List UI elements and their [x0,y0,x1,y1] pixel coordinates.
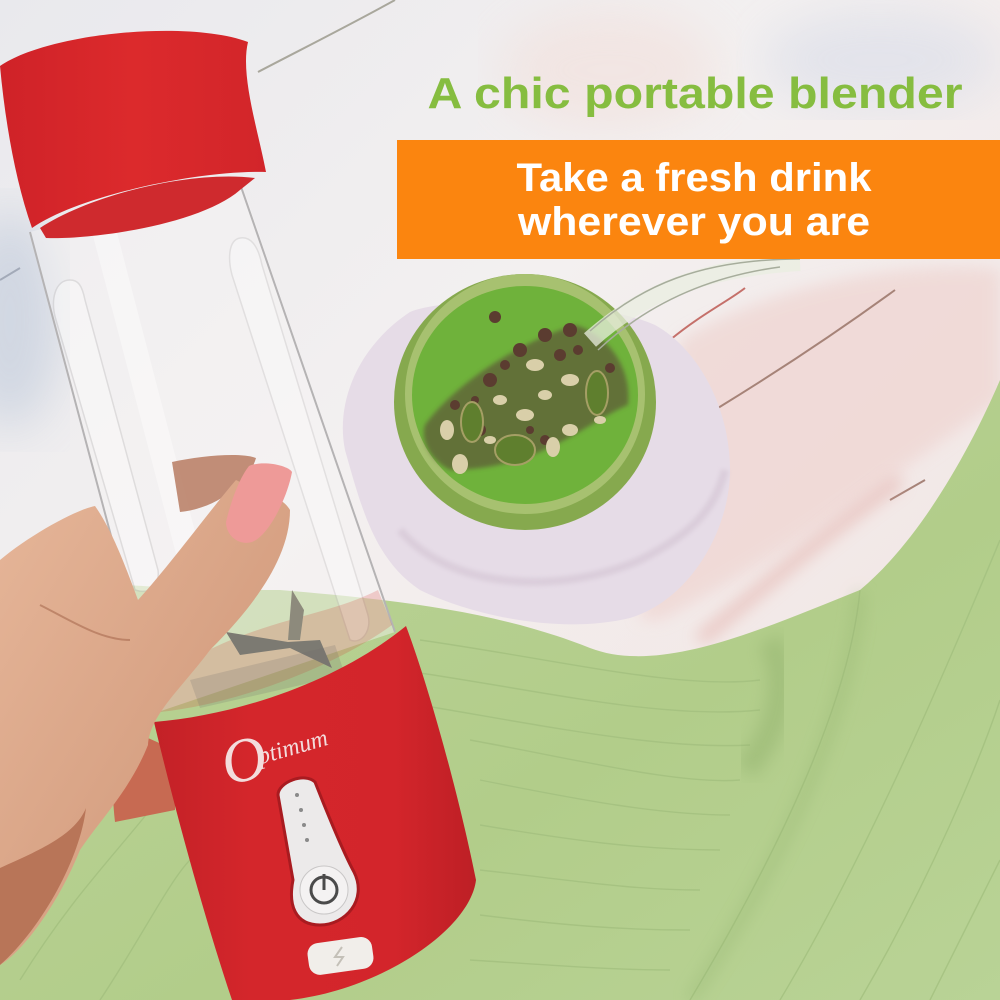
control panel [278,778,358,925]
charging port [306,936,375,976]
icon: power button [300,866,348,914]
brand wordmark: O [213,722,275,799]
seed topping [424,311,628,474]
lilac plate [343,302,730,624]
orange banner [397,140,1000,259]
title: A chic portable blender [428,69,962,118]
smoothie glass [394,259,800,530]
blade [190,590,345,708]
green towel [0,380,1000,1000]
glass jar [30,178,395,712]
brand wordmark: ptimum [253,725,331,771]
glass straw [590,262,800,340]
hand holding blender [0,463,292,965]
red lid [0,31,266,238]
orange banner: wherever you are [517,200,870,244]
orange banner: Take a fresh drink [516,156,872,200]
red base [154,626,476,1000]
pink nail [226,463,292,543]
finger behind blender [113,730,175,822]
portable blender [0,31,476,1000]
